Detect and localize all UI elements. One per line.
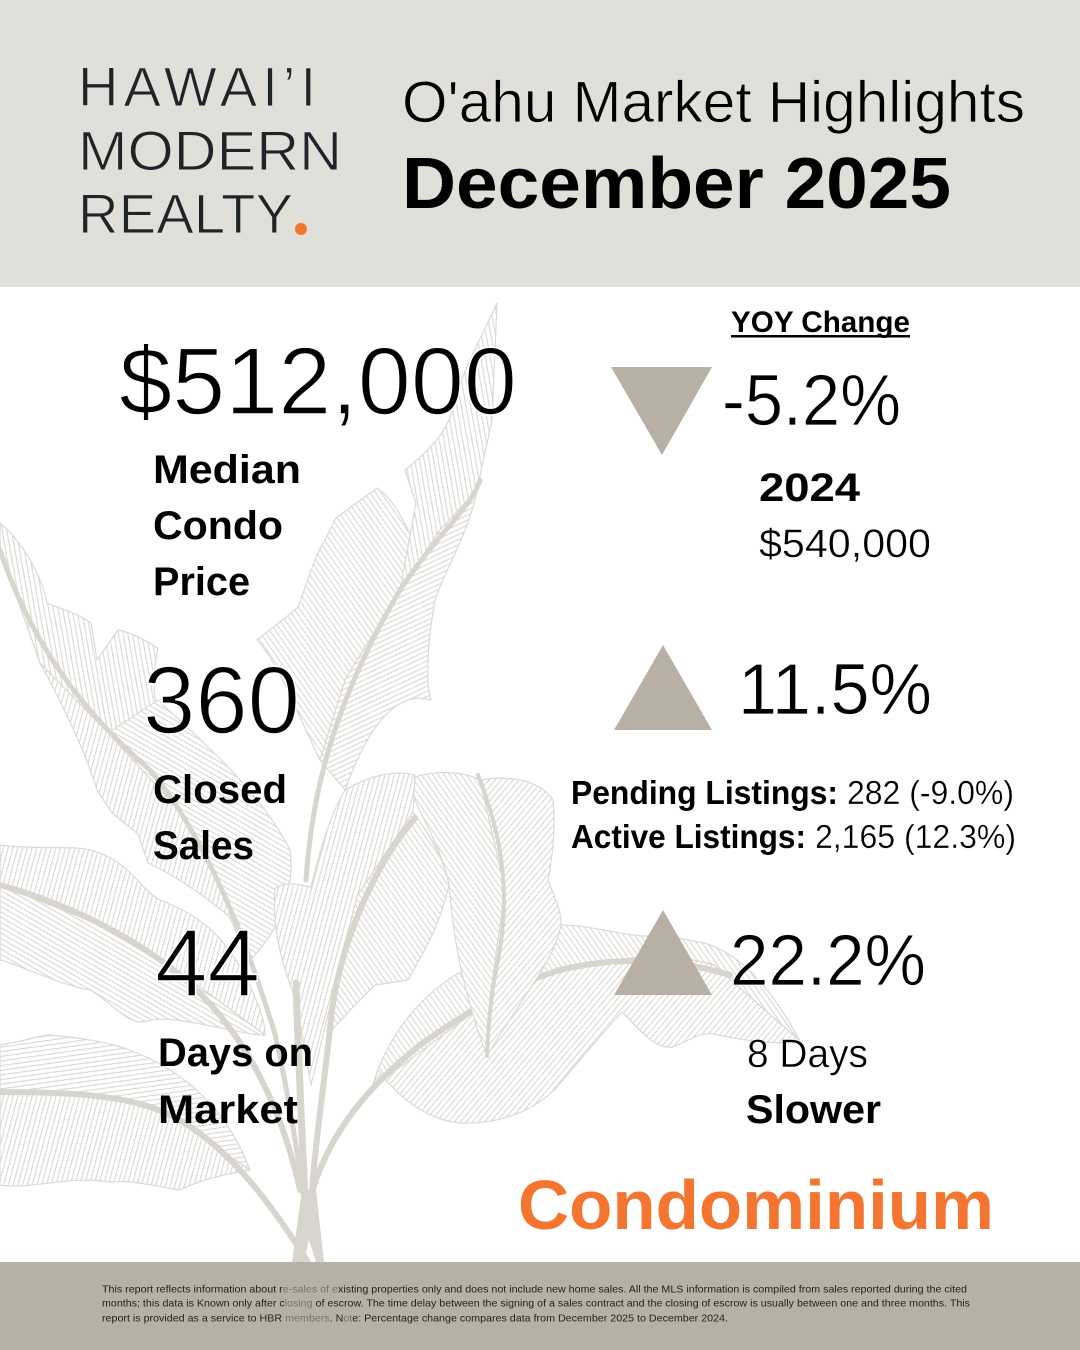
label: Days on (158, 1031, 313, 1075)
footer panel (0, 1262, 1080, 1350)
YOY: closed sales up (614, 645, 932, 730)
header background (0, 0, 1080, 287)
percent: 11.5% (738, 650, 932, 730)
logo: Hawai'i Modern Realty: MODERN (78, 119, 342, 182)
label: Sales (153, 824, 254, 868)
stat: median condo price (119, 328, 517, 604)
value: 44 (155, 910, 260, 1017)
botanical leaf illustration (0, 303, 800, 1262)
percent: -5.2% (722, 361, 901, 441)
2024 comparison: $540,000 (759, 522, 931, 566)
days slower: Slower (746, 1088, 881, 1132)
logo: Hawai'i Modern Realty: HAWAI’I (78, 55, 316, 118)
plant stems (292, 983, 324, 1262)
YOY change heading: YOY Change (731, 306, 910, 339)
YOY: days on market up (614, 910, 926, 1132)
2024 comparison (759, 466, 931, 566)
header panel (0, 0, 1080, 287)
active listings (571, 818, 1016, 855)
leaf: lower left (0, 1035, 308, 1262)
disclaimer: report is provided as a service to HBR members. Note: Percentage change compares data from December 2025 to December 2024. (102, 1314, 728, 1324)
disclaimer: months; this data is Known only after c losing of escrow. The time delay between the signing of a sales contract and the closing of escrow is usually between one and three months. This (102, 1298, 970, 1310)
label: Closed (153, 768, 287, 812)
pending listings: Pending Listings: (571, 774, 838, 811)
leaf: middle left (0, 845, 300, 1190)
disclaimer (102, 1284, 970, 1324)
label (153, 768, 287, 868)
logo: Hawai'i Modern Realty: REALTY (78, 182, 293, 245)
days slower: 8 Days (747, 1032, 868, 1076)
days slower (746, 1032, 881, 1132)
stat: days on market (155, 910, 313, 1132)
title: O'ahu Market Highlights (402, 70, 1025, 135)
footer background (0, 1262, 1080, 1350)
icon: up triangle (614, 910, 712, 995)
title date: December 2025 (402, 144, 951, 224)
pending listings: 282 (-9.0%) (847, 774, 1014, 811)
value: 360 (143, 647, 300, 754)
icon: up triangle (614, 645, 712, 730)
leaf: right hanging (408, 772, 561, 1056)
pending listings (571, 774, 1014, 811)
label: Condo (153, 504, 283, 548)
label: Market (158, 1088, 298, 1132)
label: Median (153, 448, 301, 492)
label (158, 1031, 313, 1132)
active listings: Active Listings: (571, 818, 806, 855)
leaf: top right (257, 303, 497, 880)
label (153, 448, 301, 604)
property type label: Condominium (518, 1166, 994, 1244)
2024 comparison: 2024 (759, 466, 861, 510)
label: Price (153, 560, 250, 604)
percent: 22.2% (730, 921, 926, 1001)
icon: down triangle (611, 367, 712, 455)
active listings: 2,165 (12.3%) (815, 818, 1016, 855)
value: $512,000 (119, 328, 517, 435)
leaf: upper left (0, 523, 306, 1215)
disclaimer: This report reflects information about r e-sales of existing properties only and does not include new home sales. All the MLS information is compiled from sales reported during the cited (102, 1284, 967, 1296)
logo: Hawai'i Modern Realty (78, 55, 342, 245)
stat: closed sales (143, 647, 300, 868)
leaf: centre (274, 773, 449, 1205)
listings detail (571, 774, 1016, 855)
YOY: price down (611, 361, 931, 566)
leaf: right arched (311, 925, 800, 1195)
